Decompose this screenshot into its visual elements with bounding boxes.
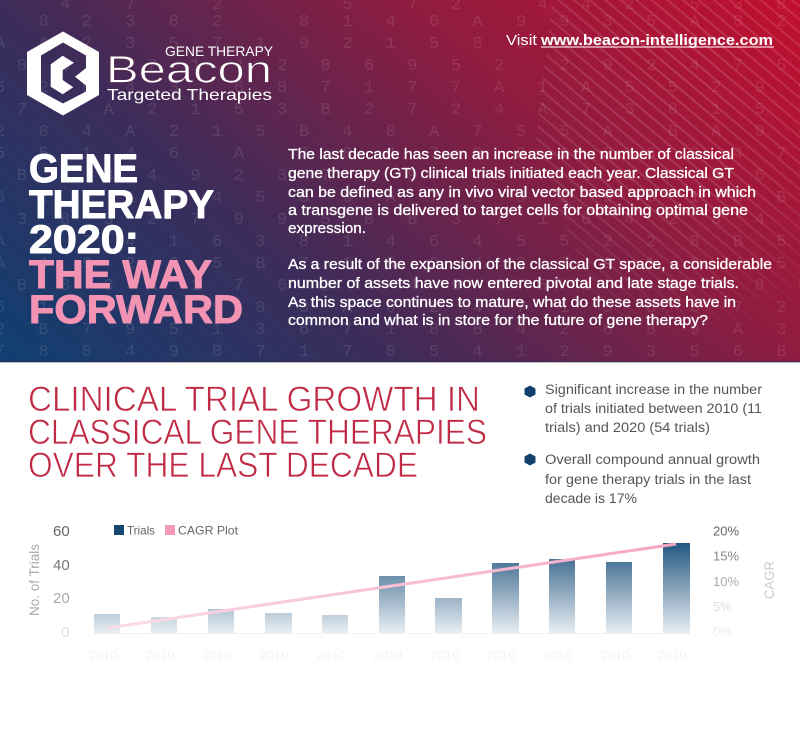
CAGR line: [107, 544, 676, 628]
x axis labels: 2010: [260, 648, 288, 663]
legend: Trials: [127, 524, 155, 538]
x axis labels: 2010: [89, 648, 117, 663]
callout: compound growth bullet: decade is 17%: [545, 491, 637, 506]
heading: clinical trial growth: CLASSICAL GENE THERAPIES: [28, 413, 487, 452]
callout: trial increase bullet: trials) and 2020 (54 trials): [545, 420, 710, 435]
right axis: CAGR: 10%: [713, 574, 739, 589]
x axis labels: 2010: [487, 648, 515, 663]
text block: introduction paragraph two: As a result of the expansion of the classical GT space, a considerable: [288, 257, 772, 273]
left axis: number of trials: 20: [53, 590, 70, 607]
right axis: CAGR: [713, 524, 777, 639]
x axis labels: 2010: [374, 648, 402, 663]
title: 2020:: [29, 218, 139, 262]
callout: trial increase bullet: [524, 382, 763, 435]
title: GENE: [29, 147, 138, 191]
x axis labels: 2010: [146, 648, 174, 663]
text block: introduction paragraph two: common and what is in store for the future of gene therapy?: [288, 313, 708, 329]
text block: introduction paragraph one: gene therapy (GT) clinical trials initiated each year. Classical GT: [288, 166, 734, 182]
left axis: number of trials: 0: [61, 624, 69, 641]
icon: hexagon B mark: [27, 32, 99, 116]
right axis: CAGR: 15%: [713, 548, 739, 564]
x axis labels: [89, 648, 686, 663]
callout: compound growth bullet: for gene therapy trials in the last: [545, 472, 751, 487]
legend: CAGR Plot: [178, 524, 239, 538]
x axis labels: 2010: [658, 648, 686, 663]
bars: [94, 543, 690, 633]
callout: compound growth bullet: [524, 452, 760, 506]
background pattern: character grid: [0, 0, 800, 362]
logo: Beacon Targeted Therapies: [27, 32, 274, 116]
heading: clinical trial growth: CLINICAL TRIAL GROWTH IN: [28, 380, 480, 419]
left axis: number of trials: 40: [53, 557, 70, 574]
link: visit website: Visit: [506, 32, 538, 49]
x axis labels: 2010: [431, 648, 459, 663]
logo: Beacon Targeted Therapies: Beacon: [106, 50, 272, 92]
heading: clinical trial growth: OVER THE LAST DECADE: [28, 446, 418, 485]
title: THERAPY: [29, 183, 214, 227]
panel: header banner: [0, 0, 800, 362]
text block: introduction paragraph one: The last decade has seen an increase in the number of classical: [288, 147, 734, 163]
x axis labels: 2010: [203, 648, 231, 663]
callout: compound growth bullet: Overall compound annual growth: [545, 452, 760, 467]
legend: [114, 524, 239, 538]
right axis: CAGR: 20%: [713, 524, 739, 538]
icon: hexagon bullet: [524, 386, 536, 398]
bar chart: trials and CAGR plot: [26, 523, 777, 663]
icon: hexagon bullet: [524, 454, 536, 466]
x axis labels: 2010: [601, 648, 629, 663]
x axis labels: 2010: [544, 648, 572, 663]
title: THE WAY: [29, 253, 212, 297]
text block: introduction paragraph one: [288, 147, 756, 237]
right axis: CAGR: 5%: [713, 599, 732, 614]
text block: introduction paragraph two: As this space continues to mature, what do these assets have in: [288, 295, 736, 311]
background pattern: diagonal stripes: [535, 0, 800, 306]
logo: Beacon Targeted Therapies: Targeted Therapies: [107, 87, 272, 104]
left axis: number of trials: 60: [53, 523, 70, 540]
x axis labels: 2010: [317, 648, 345, 663]
text block: introduction paragraph one: a transgene is delivered to target cells for obtaining optimal gene: [288, 203, 748, 219]
title: [29, 147, 243, 332]
link: visit website: www.beacon-intelligence.com: [540, 32, 773, 49]
text block: introduction paragraph two: [288, 257, 772, 329]
callout: trial increase bullet: of trials initiated between 2010 (11: [545, 401, 762, 416]
left axis: number of trials: [26, 523, 70, 641]
right axis: CAGR: 0%: [713, 624, 732, 639]
text block: introduction paragraph one: can be defined as any in vivo viral vector based approach in which: [288, 185, 756, 201]
callout: trial increase bullet: Significant increase in the number: [545, 382, 763, 397]
text block: introduction paragraph two: number of assets have now entered pivotal and late stage trials.: [288, 276, 739, 292]
text block: introduction paragraph one: expression.: [288, 221, 366, 237]
left axis: number of trials: No. of Trials: [26, 544, 42, 616]
right axis: CAGR: CAGR: [761, 561, 777, 599]
logo: Beacon Targeted Therapies: GENE THERAPY: [165, 43, 274, 59]
heading: clinical trial growth: [28, 380, 487, 485]
title: FORWARD: [29, 288, 243, 332]
